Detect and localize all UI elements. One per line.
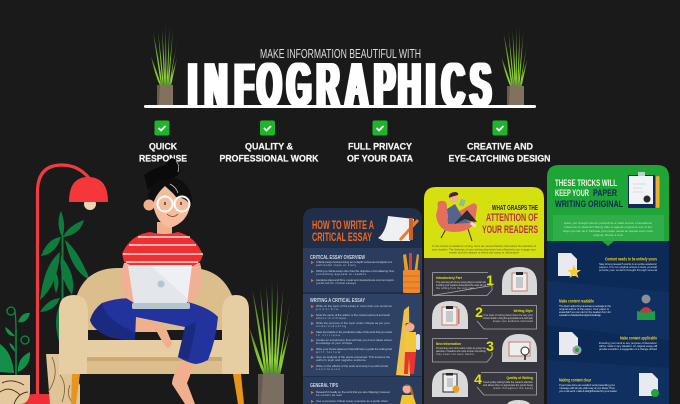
tips bullets: Research broadly on the work that you are critiquing; however xyxy=(316,390,390,394)
row 3: they have not seen before xyxy=(436,352,475,356)
row 1 xyxy=(558,253,658,278)
tips bullets: Use a previous critical essay example as a guide when xyxy=(316,399,388,403)
feature: quality and professional work: PROFESSIONAL WORK xyxy=(220,154,319,164)
writing bullets: Write on the effects of the work and wrap it up with a brief xyxy=(316,364,388,368)
row 4 xyxy=(559,373,659,397)
row 1: 1 xyxy=(486,272,494,288)
panel title: PAPER xyxy=(593,188,617,199)
hair back xyxy=(148,177,192,205)
feature: full privacy: OF YOUR DATA xyxy=(347,154,413,164)
overview heading: CRITICAL ESSAY OVERVIEW xyxy=(310,255,365,261)
feature: quality and professional work: QUALITY & xyxy=(245,142,293,152)
panel title: WRITING ORIGINAL xyxy=(555,199,623,210)
row 2: Writing Style xyxy=(514,309,533,313)
feature: creative design: CREATIVE AND xyxy=(467,142,533,152)
row 3: attention of readers who want to learn something xyxy=(436,349,487,353)
overview bullets: preferred for critical essays xyxy=(316,281,356,285)
row 2: Make content readable xyxy=(559,298,595,304)
row 1: The opening part of any essay plays a crucial role xyxy=(436,280,487,284)
row 1: provide your content thought through several xyxy=(599,268,657,272)
intro text: reader and the degree to which the essay is informative xyxy=(449,250,520,254)
row 2: keeps your audience interested xyxy=(493,319,534,323)
writing bullets: Create an introduction that will help you focus ideas where xyxy=(316,338,392,342)
row 4: message with simple, plain way of your ideas. Then xyxy=(559,386,615,390)
fringe strand xyxy=(165,186,180,198)
row 2: The best method to put across a message in the xyxy=(559,304,611,308)
ear xyxy=(144,200,154,210)
row 4: Quality of Writing xyxy=(506,376,533,380)
writing bullets: possible xyxy=(316,307,338,311)
row 3: will be made in any situation. An original essay will xyxy=(599,344,657,348)
writing bullets xyxy=(311,304,392,371)
trouser shadows xyxy=(90,303,196,360)
writing bullets: conclusion xyxy=(316,367,340,371)
row 4: made throughout the essay xyxy=(493,386,534,390)
row 3: Make content applicable xyxy=(620,336,658,340)
row 2: essential if you can do it in the readers form for xyxy=(559,310,611,314)
row 4: Making content clear xyxy=(559,378,591,382)
writing bullets: Write on the topic of the essay in more than one sentence xyxy=(316,304,392,308)
row 3 xyxy=(559,332,658,355)
row 2 xyxy=(559,294,655,320)
face xyxy=(153,186,190,228)
row 2: Your style of writing determines the way your xyxy=(483,313,533,317)
intro box xyxy=(553,215,664,246)
row 2: original author of the paper. Your paper is xyxy=(559,307,610,311)
row 1: Content needs to be entirely yours xyxy=(605,256,658,262)
row 4: If you have done an excellent work presenting your xyxy=(559,383,615,387)
panel title xyxy=(555,178,623,210)
row 4: Good quality writing holds the reader's attention xyxy=(483,380,534,384)
overview bullets xyxy=(311,260,395,285)
row 5 dome xyxy=(507,400,530,404)
section: tips xyxy=(303,377,422,404)
writing bullets: about to critique xyxy=(316,316,346,320)
eyes xyxy=(165,202,181,205)
row 3: Ensuring your work to any purpose of discussion xyxy=(599,341,657,345)
panel: reader attention xyxy=(424,187,544,404)
icon: tall leaf plant xyxy=(40,211,90,345)
overview bullets: Writing a critical essay often has the objective of considering how xyxy=(316,269,395,273)
writing bullets: understanding xyxy=(316,324,346,328)
writing bullets: Write the purpose of the topic under critique as per your xyxy=(316,321,390,325)
panel title: YOUR READERS xyxy=(482,224,538,236)
intro text: In the context of academic writing, there are several factors that attract the attention of xyxy=(432,244,536,248)
row 3 xyxy=(432,334,537,362)
tips heading: GENERAL TIPS xyxy=(310,383,339,389)
panel title: HOW TO WRITE A xyxy=(312,220,374,232)
row 4 xyxy=(432,369,536,397)
tips bullets xyxy=(311,390,390,403)
diagonal bands xyxy=(547,281,669,340)
row 1 xyxy=(432,267,537,296)
row 4: and allows them to appreciate the points being xyxy=(483,383,534,387)
row 2: 2 xyxy=(475,304,483,320)
writing bullets: Write your thesis statement that will help to guide the writing that xyxy=(316,347,392,351)
row 1: Introductory Part xyxy=(436,276,463,280)
icon: floor lamp xyxy=(22,165,108,404)
panel: critical essay xyxy=(303,208,422,404)
icon: student with giant pencil xyxy=(396,306,420,376)
row 3: New Information xyxy=(436,342,461,346)
row 3: 3 xyxy=(486,338,494,354)
icon: clipboard xyxy=(628,172,660,208)
laptop xyxy=(128,265,192,304)
feature: quick response: QUICK xyxy=(149,142,177,152)
icon: right header plant xyxy=(502,26,528,105)
writing bullets: Note the name of the author or the content element and work xyxy=(316,313,390,317)
row 3: Presenting new information helps to grasp the xyxy=(436,346,487,350)
panel title: CRITICAL ESSAY xyxy=(312,232,372,244)
overview bullets: particular topic or story xyxy=(316,263,356,267)
icon: student at bottom xyxy=(400,384,416,404)
panel title xyxy=(482,203,538,236)
feature: full privacy: FULL PRIVACY xyxy=(348,142,413,152)
icon: sofa xyxy=(59,268,249,404)
panel title: KEEP YOUR xyxy=(555,188,589,199)
overview bullets: something appeals to readers xyxy=(316,272,366,276)
shin and foot xyxy=(135,316,172,348)
intro text: your readers. The features of your writing determine how effectively you engage your xyxy=(432,248,536,252)
writing bullets: to critique xyxy=(316,333,340,337)
row 2: a reader to understand and give knowledge xyxy=(559,313,601,317)
row 1: papers. It is not original unless it feels yourself xyxy=(599,265,657,269)
icon: paper and pencil xyxy=(378,216,418,241)
subtitle: MAKE INFORMATION BEAUTIFUL WITH xyxy=(260,47,421,61)
feature: full privacy xyxy=(347,120,413,164)
writing bullets: knowledge of your critique xyxy=(316,341,352,345)
glasses xyxy=(158,196,190,212)
intro box: reference to students? Being able to appear original is one of the xyxy=(564,225,652,229)
feature: quick response: RESPONSE xyxy=(139,154,188,164)
row 1: in letting your readers understand the main aim of xyxy=(436,283,486,287)
title underline xyxy=(144,105,536,108)
row 3: provide a solution, a suggestion or a change of fixed xyxy=(599,347,657,351)
writing bullets: author's logic and negative evidence xyxy=(316,358,366,362)
illustration: person with laptop xyxy=(90,158,218,404)
icon: pencil cup xyxy=(403,253,420,293)
striped shirt xyxy=(122,232,203,266)
row 4: 4 xyxy=(474,371,482,387)
writing bullets: State the beliefs or the production date of the work that you want xyxy=(316,330,392,334)
panel title: WHAT GRASPS THE xyxy=(492,203,538,212)
intro box: ways you can do it. Motivate your paper needs an appear even more xyxy=(563,229,653,233)
icon: small potted vine xyxy=(0,307,30,375)
writing heading: WRITING A CRITICAL ESSAY xyxy=(310,298,366,304)
writing bullets: Give an analysis of the points presented. This involves the xyxy=(316,355,390,359)
yellow header xyxy=(424,187,544,258)
title: INFOGRAPHICS xyxy=(188,52,491,120)
icon: wood stump xyxy=(46,354,80,404)
icon: wood pot xyxy=(0,375,30,404)
writing bullets: will follow xyxy=(316,350,341,354)
feature: quality and professional work xyxy=(220,120,319,164)
intro text xyxy=(432,244,536,254)
smile xyxy=(167,214,178,216)
feature: quick response xyxy=(139,120,188,164)
section: writing xyxy=(303,294,422,376)
icon: left header plant xyxy=(151,25,178,105)
overview bullets: Literature plays and films, music and visual arts are common topics xyxy=(316,278,394,282)
feature: creative design: EYE-CATCHING DESIGN xyxy=(448,154,551,164)
intro box: original. Below it how xyxy=(593,233,624,237)
icon: right floor plant xyxy=(249,279,291,404)
neck xyxy=(157,222,172,236)
trousers xyxy=(90,298,218,364)
arms xyxy=(121,263,202,303)
panel title xyxy=(312,220,374,244)
icon: reader in armchair xyxy=(436,192,477,241)
row 1: Stay strong research points in an entire academic xyxy=(599,262,658,266)
row 4: you must work, make it straightforward for your reader xyxy=(559,389,617,393)
section: overview xyxy=(303,248,422,292)
lower leg xyxy=(172,360,195,404)
panel title: THESE TRICKS WILL xyxy=(555,178,617,189)
overview bullets: Critical essay involves doing an in-depth review and analysis of a xyxy=(316,260,392,264)
tips bullets: be certain as well xyxy=(316,393,342,397)
panel title: ATTENTION OF xyxy=(486,212,538,224)
feature: creative design xyxy=(448,120,551,164)
row 2 xyxy=(432,301,536,329)
hair swirl xyxy=(144,158,180,190)
row 2: content reads. Using the appropriate tone and style xyxy=(483,316,534,320)
green header xyxy=(547,165,669,241)
intro box: Have you thought about yourself as a valid source of academic xyxy=(564,221,652,225)
panel: writing tricks xyxy=(547,165,669,404)
row 1: the writing from the very start xyxy=(436,286,474,290)
